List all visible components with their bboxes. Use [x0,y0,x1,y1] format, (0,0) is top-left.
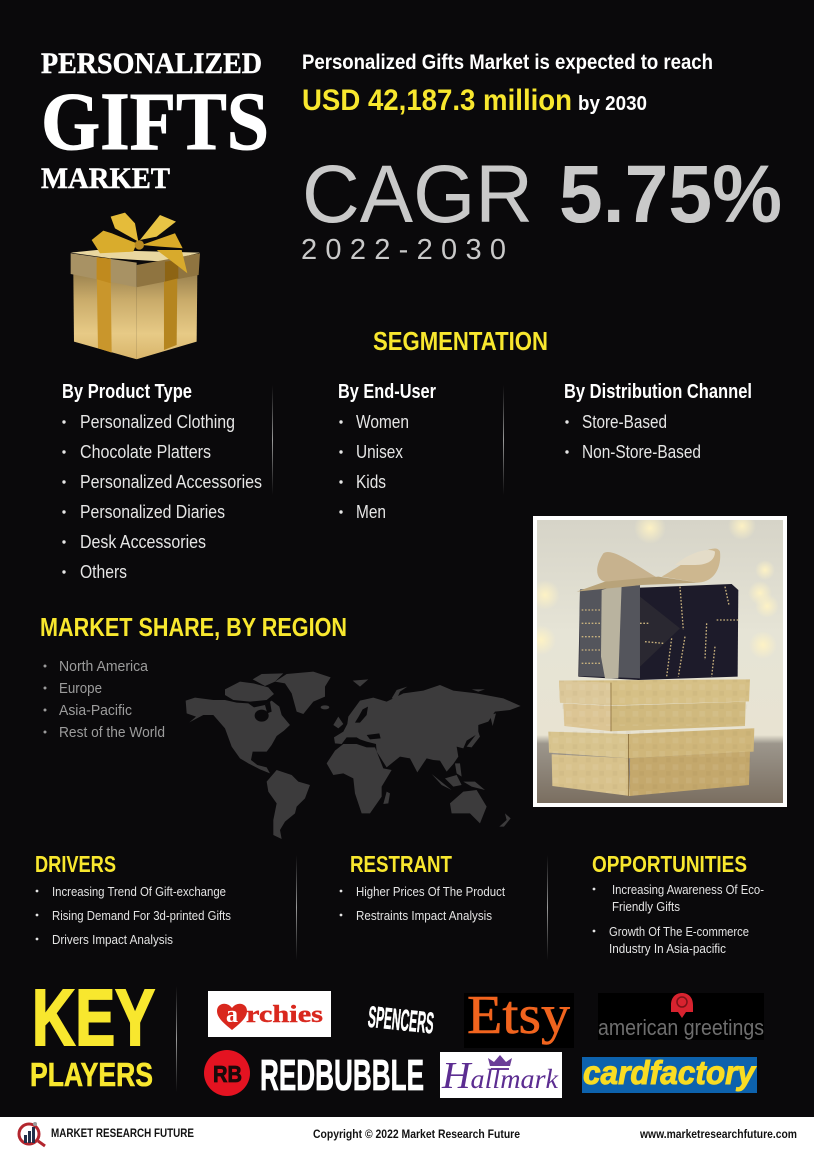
logo: redbubble [204,1050,424,1100]
logo: american greetings: american greetings [598,1015,764,1040]
panel: opportunities: OPPORTUNITIES [592,851,747,877]
title: MARKET [41,162,170,195]
panel: by product type: Personalized Clothing [80,412,235,432]
panel: restraint: RESTRANT [350,851,452,877]
panel: opportunities: Growth Of The E-commerce [609,925,749,939]
CAGR figure: 5.75% [559,149,782,240]
icon: golden gift box [71,213,200,359]
photo: stacked gift boxes [526,512,787,807]
text: SPENCERS [366,1001,435,1040]
market forecast headline [302,51,713,117]
logo: archies [208,991,331,1037]
panel: by distribution channel [564,381,752,462]
region list: North America [59,658,149,675]
panel: opportunities [592,851,764,956]
panel: opportunities: Friendly Gifts [612,900,680,914]
logo: american greetings [598,993,764,1040]
logo: hallmark: Hallmark [441,1055,559,1097]
panel: opportunities: Industry In Asia-pacific [609,942,726,956]
panel: drivers: Increasing Trend Of Gift-exchange [52,885,226,899]
panel: opportunities: Increasing Awareness Of Eco- [612,883,764,897]
heading: key players: PLAYERS [30,1056,153,1093]
panel: by product type: Others [80,562,127,582]
panel: by end-user: Kids [356,472,386,492]
panel: by product type: Desk Accessories [80,532,206,552]
panel: by end-user: Women [356,412,409,432]
panel: by product type: Personalized Diaries [80,502,225,522]
heading: segmentation: SEGMENTATION [373,326,548,356]
logo: redbubble: REDBUBBLE [260,1051,424,1100]
market forecast headline: Personalized Gifts Market is expected to reach [302,51,713,74]
panel: by distribution channel: Non-Store-Based [582,442,701,462]
CAGR figure: 2022-2030 [301,234,506,266]
market forecast headline: USD 42,187.3 million [302,84,572,117]
region list: Europe [59,680,102,697]
panel: by product type: By Product Type [62,381,192,403]
footer bar: MARKET RESEARCH FUTURE [51,1126,194,1140]
panel: drivers [35,851,231,947]
title [41,47,269,195]
logo: redbubble: RB [213,1061,242,1087]
heading: key players [30,973,155,1093]
logo: cardfactory: cardfactory [583,1054,757,1091]
logo: archies: rchies [246,1002,323,1028]
panel: by end-user: By End-User [338,381,436,403]
panel: restraint [340,851,505,923]
panel: drivers: Rising Demand For 3d-printed Gifts [52,909,231,923]
heading: market share by region: MARKET SHARE, BY REGION [40,612,347,642]
world map [186,672,521,839]
panel: by end-user [338,381,436,522]
icon: market research future logo [19,1122,45,1146]
CAGR figure [301,149,782,266]
CAGR figure: CAGR [302,149,533,240]
logo: archies: a [226,1002,238,1028]
title: GIFTS [41,75,269,167]
region list: Rest of the World [59,724,165,741]
panel: drivers: DRIVERS [35,851,116,877]
logo: etsy: Etsy [467,984,571,1045]
panel: by product type: Chocolate Platters [80,442,211,462]
market forecast headline: by 2030 [578,93,647,115]
region list: Asia-Pacific [59,702,132,719]
panel: by product type [62,381,262,582]
panel: restraint: Higher Prices Of The Product [356,885,505,899]
footer bar: Copyright © 2022 Market Research Future [313,1127,520,1141]
panel: drivers: Drivers Impact Analysis [52,933,173,947]
panel: by end-user: Men [356,502,386,522]
footer bar [0,1117,814,1150]
region list [44,658,165,741]
panel: restraint: Restraints Impact Analysis [356,909,492,923]
panel: by distribution channel: Store-Based [582,412,667,432]
title: PERSONALIZED [41,47,262,80]
panel: by end-user: Unisex [356,442,403,462]
panel: by distribution channel: By Distribution Channel [564,381,752,403]
heading: key players: KEY [32,973,155,1062]
panel: by product type: Personalized Accessories [80,472,262,492]
